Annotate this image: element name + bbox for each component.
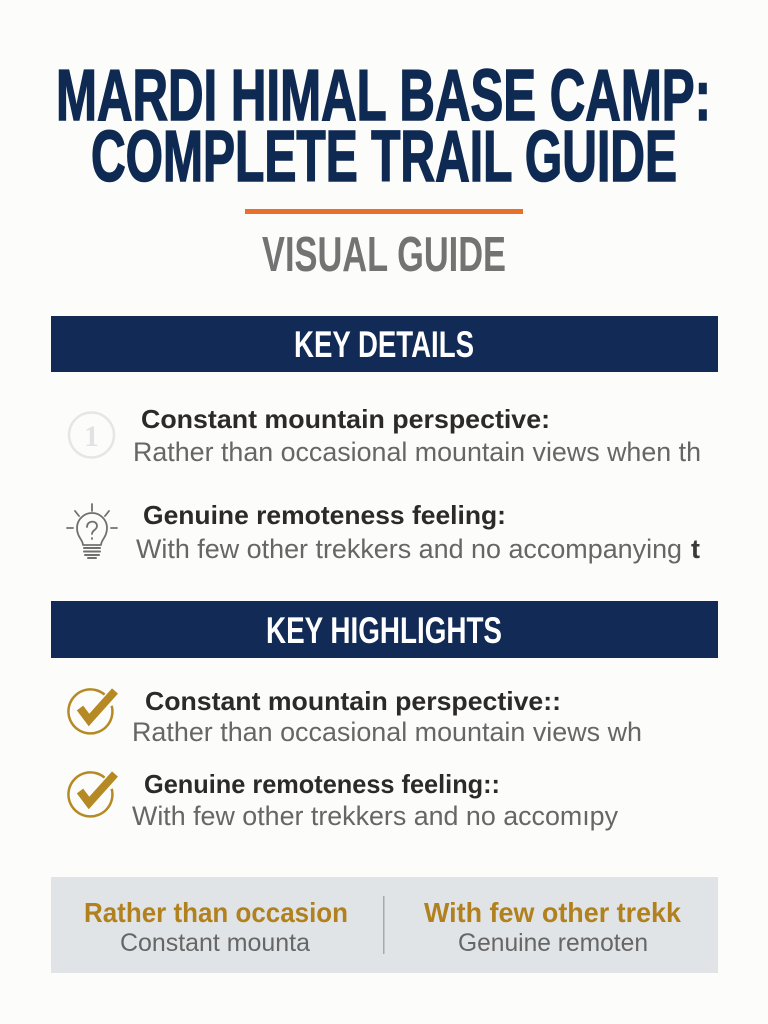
icon: gold check one xyxy=(68,689,115,733)
icon: gold check two xyxy=(68,772,115,816)
panel: key details xyxy=(51,316,718,564)
highlight item: constant mountain perspective: Rather than occasional mountain views wh xyxy=(132,717,642,747)
summary background xyxy=(51,877,718,973)
orange title divider xyxy=(245,209,523,214)
icon: lightbulb with question mark xyxy=(67,504,117,558)
key details header bar xyxy=(51,316,718,372)
detail item: genuine remoteness feeling: Genuine remoteness feeling: xyxy=(143,500,506,530)
summary stat: right: With few other trekk xyxy=(424,897,681,928)
detail item: constant mountain perspective: Rather than occasional mountain views when th xyxy=(133,437,701,467)
detail item: genuine remoteness feeling: With few other trekkers and no accompanying xyxy=(136,534,682,564)
summary stat: left xyxy=(84,897,348,957)
highlight item: constant mountain perspective xyxy=(132,686,642,747)
detail item: genuine remoteness feeling xyxy=(136,500,700,564)
summary stat: right: Genuine remoten xyxy=(458,929,648,957)
detail item: genuine remoteness feeling: t xyxy=(691,534,700,564)
summary stat: left: Rather than occasion xyxy=(84,897,348,928)
key highlights heading: KEY HIGHLIGHTS xyxy=(266,610,502,651)
icon: numbered circle: 1 xyxy=(84,420,99,453)
title xyxy=(56,56,711,197)
summary stat: right xyxy=(424,897,681,957)
key highlights header bar xyxy=(51,601,718,658)
panel: summary strip xyxy=(51,877,718,973)
detail item: constant mountain perspective xyxy=(133,404,701,467)
key details heading: KEY DETAILS xyxy=(294,324,474,365)
panel: key highlights xyxy=(51,601,718,831)
detail item: constant mountain perspective: Constant mountain perspective: xyxy=(141,404,550,434)
highlight item: genuine remoteness feeling: Genuine remoteness feeling:: xyxy=(144,769,500,799)
summary column divider xyxy=(383,896,384,954)
icon: numbered circle xyxy=(69,412,114,458)
highlight item: constant mountain perspective: Constant mountain perspective:: xyxy=(145,686,561,716)
summary stat: left: Constant mounta xyxy=(120,929,310,957)
highlight item: genuine remoteness feeling xyxy=(132,769,618,831)
highlight item: genuine remoteness feeling: With few other trekkers and no accomıpy xyxy=(132,801,618,831)
subtitle: VISUAL GUIDE xyxy=(262,228,506,282)
